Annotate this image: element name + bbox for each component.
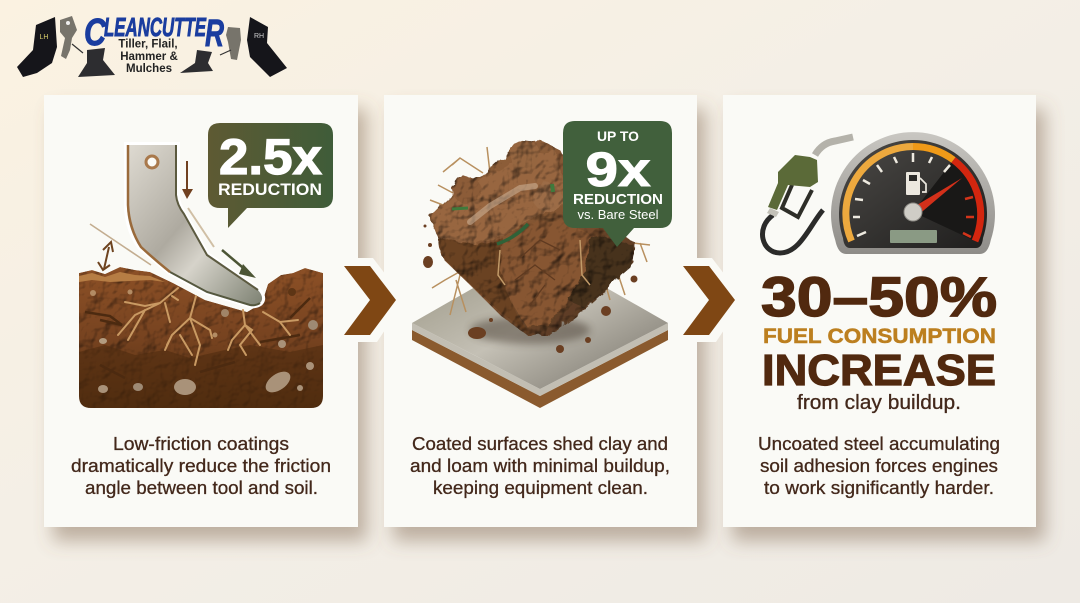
icon: right flail hook [220,27,241,60]
hub [904,203,922,221]
display [890,230,937,243]
badge: 9x reduction: vs. Bare Steel [578,208,658,222]
soil cross-section [79,267,323,408]
card [723,95,1036,527]
tagline [118,38,178,75]
tagline: Tiller, Flail, [118,38,178,50]
roots behind clod [430,147,650,315]
heading: increase: INCREASE [762,346,996,395]
badge: 2.5x reduction [208,123,333,228]
description: angle between tool and soil. [85,477,318,498]
card [44,95,358,527]
icon: fuel gauge [831,132,995,254]
gauge ticks [853,153,974,237]
wordmark: C [84,12,106,54]
needle [912,178,962,216]
icon: LH blade: LH [40,34,48,41]
description: and loam with minimal buildup, [410,455,670,476]
arrow: first to second panel [344,258,405,342]
icon: RH blade: RH [254,33,264,40]
icon: left flail hook [60,16,83,59]
icon: left hammer [78,48,115,77]
heading: fuel consumption: FUEL CONSUMPTION [763,325,996,348]
stones [90,288,318,397]
friction angle lines and arrows [90,161,256,278]
badge: 2.5x reduction: REDUCTION [218,180,322,199]
description: keeping equipment clean. [433,477,648,498]
roots on clod [498,240,590,285]
stat: 30-50%: 30–50% [761,265,997,328]
tagline: Hammer & [120,51,178,63]
badge: 9x reduction: 9x [586,144,651,197]
badge: 9x reduction [563,121,672,247]
logo: Cleancutter [17,12,287,77]
panel: fuel consumption [723,95,1036,527]
badge: 9x reduction: UP TO [597,128,639,144]
wordmark: R [205,13,224,55]
icon: tiller blade [127,145,262,305]
fuel pump glyph [906,172,926,195]
description: Coated surfaces shed clay and [412,433,668,454]
badge: 9x reduction: REDUCTION [573,191,663,208]
panel: friction reduction [44,95,358,527]
subheading: from clay buildup. [797,392,961,414]
description: to work significantly harder. [764,477,994,498]
icon: right hammer [180,50,213,73]
tagline: Mulches [126,63,172,75]
icon: fuel nozzle [763,137,853,253]
description [410,433,670,498]
panel: clay shedding [384,95,697,527]
wordmark: LEANCUTTE [104,12,206,42]
steel plate [412,250,668,408]
icon: RH blade [247,17,287,77]
description: dramatically reduce the friction [71,455,331,476]
clay clod [423,140,638,353]
description [71,433,331,498]
soil crumbs [423,224,638,353]
description [758,433,1000,498]
description: Uncoated steel accumulating [758,433,1000,454]
description: Low-friction coatings [113,433,289,454]
arrow: second to third panel [683,258,744,342]
description: soil adhesion forces engines [760,455,998,476]
roots [118,288,298,365]
badge: 2.5x reduction: 2.5x [219,129,322,185]
icon: LH blade [17,17,57,77]
wordmark [84,12,224,55]
card [384,95,697,527]
